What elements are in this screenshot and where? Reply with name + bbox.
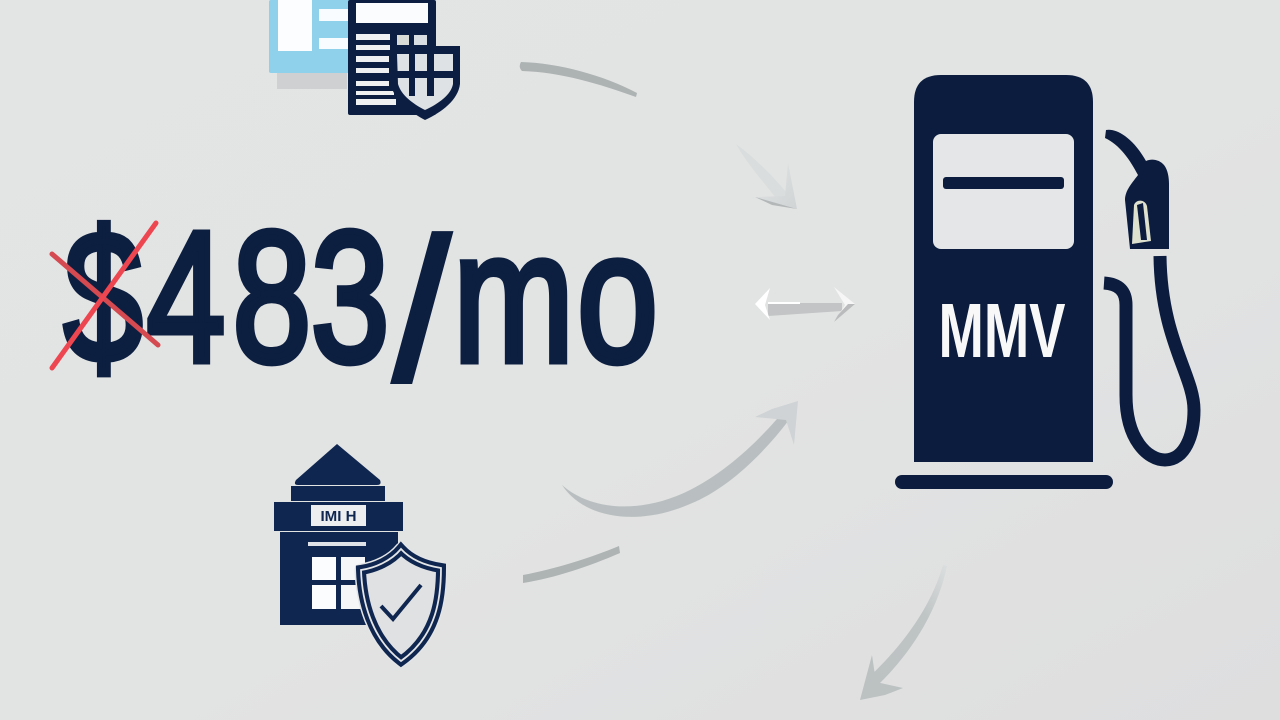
icon: bank building with shield: IMI H	[320, 508, 356, 525]
arrow: lower short dash	[523, 546, 620, 583]
icon: ID card and calculator with shield	[269, 0, 460, 120]
arrow: lower long curve to pump	[562, 401, 798, 517]
nozzle	[1105, 130, 1169, 249]
price: $483/mo: $483	[64, 193, 389, 402]
pump base	[895, 475, 1113, 489]
icon: fuel pump MMV	[895, 75, 1194, 489]
pump screen	[933, 134, 1074, 249]
pump label: MMV	[938, 288, 1066, 374]
hose	[1104, 256, 1194, 460]
arrow: upper right pointing to pump	[736, 144, 797, 209]
price: $483/mo	[64, 193, 658, 422]
arrow: top curved dash	[520, 62, 637, 97]
arrow: bottom right pointing down	[860, 565, 947, 700]
red cross over dollar sign	[52, 223, 158, 368]
price: $483/mo: /	[394, 199, 450, 422]
icon: bank building with shield	[274, 444, 441, 661]
arrow: double headed white arrow	[755, 287, 855, 322]
price: $483/mo: mo	[453, 194, 658, 401]
screen line	[943, 177, 1064, 189]
pump body	[914, 75, 1093, 462]
